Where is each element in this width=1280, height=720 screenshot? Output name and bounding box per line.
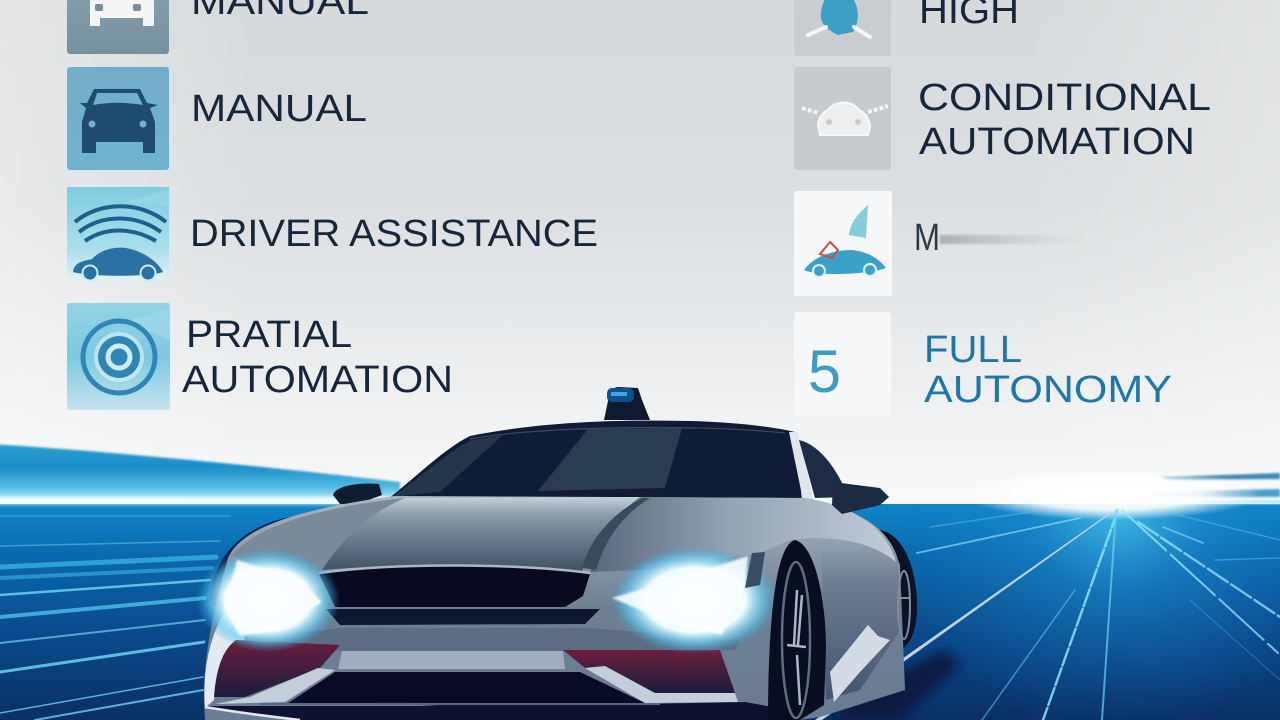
sun glare xyxy=(962,468,1262,520)
right mirror xyxy=(832,482,889,514)
centre bumper plate xyxy=(338,651,565,669)
levels: right column xyxy=(794,0,1211,416)
level: manual (cut off) xyxy=(67,0,369,54)
icon: number 5: 5 xyxy=(808,338,841,405)
icon: number 5 xyxy=(794,312,891,416)
levels: left column xyxy=(67,0,598,410)
front wheel arch xyxy=(768,540,826,720)
label: driver assistance: DRIVER ASSISTANCE xyxy=(190,213,598,255)
icon: blue car with fin xyxy=(794,191,892,296)
roof and windshield xyxy=(388,421,802,500)
label: conditional automation: AUTOMATION xyxy=(919,121,1195,163)
right horizon streaks xyxy=(1120,473,1280,504)
sensor xyxy=(604,387,650,420)
road shadow under car xyxy=(830,650,960,720)
icon: concentric target xyxy=(67,303,170,410)
icon: blue shield with tools xyxy=(794,0,891,56)
hood left shoulder xyxy=(232,498,405,572)
icon: white car with sensors xyxy=(794,67,891,170)
label: garbled glyphs: M xyxy=(914,217,940,259)
label: pratial automation: PRATIAL xyxy=(186,314,352,356)
lower intake xyxy=(288,672,645,703)
icon: car front, white xyxy=(67,0,169,54)
level: driver assistance xyxy=(67,187,598,280)
car body xyxy=(204,496,905,720)
label: pratial automation xyxy=(182,314,453,401)
hood crease xyxy=(582,498,650,570)
horizon glare line xyxy=(0,497,420,504)
level 5: full autonomy xyxy=(794,312,1172,416)
level: manual xyxy=(67,67,367,170)
right red intake xyxy=(563,650,735,693)
front wheel rim xyxy=(782,562,810,718)
left headlight xyxy=(196,548,340,652)
label: manual: MANUAL xyxy=(191,88,367,130)
label: full autonomy: AUTONOMY xyxy=(924,369,1172,411)
side window and pillar xyxy=(789,432,848,502)
left fender dark arc xyxy=(210,516,300,620)
left light streaks xyxy=(0,516,230,720)
level: garbled high automation xyxy=(794,191,1086,296)
left horizon band xyxy=(0,444,400,502)
right road glow xyxy=(880,505,1280,720)
silver splitters xyxy=(215,666,738,704)
road edge line xyxy=(815,512,1113,720)
label: pratial automation: AUTOMATION xyxy=(182,359,453,401)
car xyxy=(196,387,917,720)
icon: car front, dark xyxy=(67,67,169,170)
grille upper xyxy=(319,566,590,607)
grille lower xyxy=(326,609,600,625)
side sill xyxy=(830,625,890,702)
level: conditional automation xyxy=(794,67,1211,170)
label: conditional automation xyxy=(918,77,1211,163)
rear wheel xyxy=(870,530,917,655)
blue road scene xyxy=(0,444,1280,720)
label: full autonomy: FULL xyxy=(924,329,1022,371)
label: garbled glyphs xyxy=(914,217,1086,259)
bumper band xyxy=(240,628,740,651)
bottom lip xyxy=(205,702,800,720)
hood centre xyxy=(322,497,640,572)
left red intake xyxy=(214,640,340,697)
side panel xyxy=(820,505,900,700)
left mirror xyxy=(333,484,382,504)
right light rays xyxy=(917,510,1280,720)
rear wheel rim xyxy=(898,571,910,639)
left white rim xyxy=(204,600,245,708)
level: partial automation xyxy=(67,303,453,410)
level: high (cut off) xyxy=(794,0,1019,56)
icon: car with signal waves xyxy=(67,187,169,280)
label: conditional automation: CONDITIONAL xyxy=(918,77,1211,119)
road surface xyxy=(0,504,1280,720)
label: full autonomy xyxy=(924,329,1172,411)
right headlight xyxy=(611,546,779,654)
right fender xyxy=(590,497,896,572)
